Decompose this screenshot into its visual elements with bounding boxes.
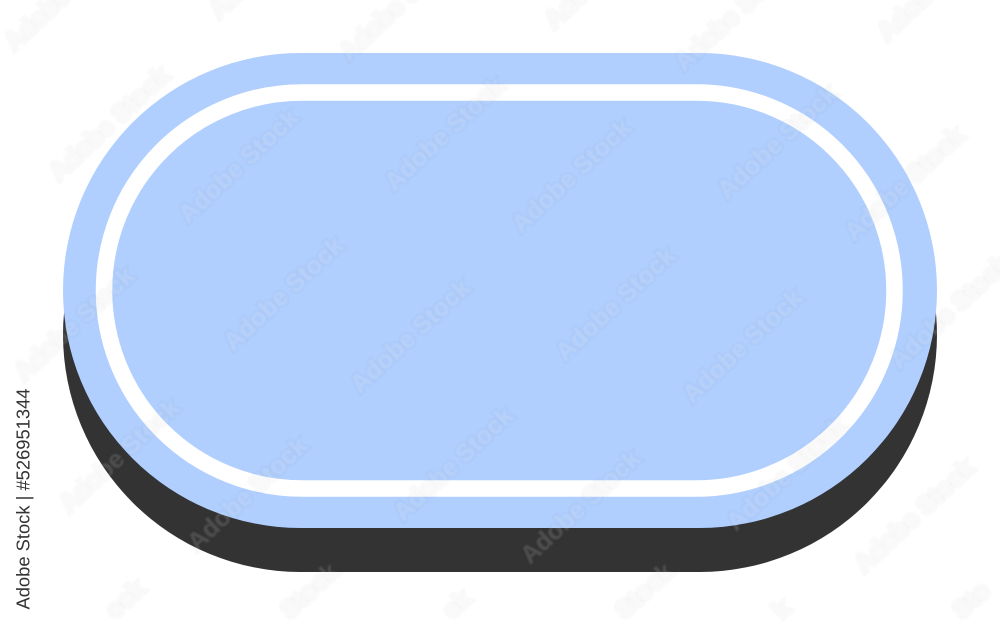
- watermark text: Adobe Stock: [182, 432, 313, 556]
- badge body: [63, 53, 937, 528]
- watermark text: Adobe Stock: [379, 72, 510, 196]
- watermark text: Adobe Stock: [849, 454, 980, 578]
- watermark text: Adobe Stock: [218, 232, 349, 356]
- watermark text: Sto: [947, 576, 996, 624]
- stock image id: Adobe Stock | #526951344: [12, 388, 34, 610]
- badge inner white ring: [104, 92, 894, 488]
- watermark text: ock: [100, 574, 151, 624]
- watermark text: Adobe Stock: [345, 274, 476, 398]
- watermark text: Adobe Stock: [506, 114, 637, 238]
- watermark text: Stock: [610, 557, 679, 624]
- watermark text: ck: [437, 585, 476, 624]
- watermark text: Adobe Stock: [550, 242, 681, 366]
- watermark text: Adobe Stock: [173, 104, 304, 228]
- watermark text: Adobe Stock: [9, 262, 140, 386]
- watermark text: Adobe Stock: [721, 412, 852, 536]
- watermark text: Adobe Stock: [54, 394, 185, 518]
- watermark text: Adobe Stock: [515, 445, 646, 569]
- watermark text: Adobe Stock: [388, 402, 519, 526]
- watermark text: Adobe Stock: [44, 62, 175, 186]
- watermark text: Adobe Stock: [677, 284, 808, 408]
- badge shadow: [63, 97, 937, 572]
- watermark text: Adobe Stock: [712, 80, 843, 204]
- watermark text: Stock: [275, 557, 344, 624]
- watermark text: k: [767, 594, 796, 624]
- watermark text: Adobe Stock: [839, 122, 970, 246]
